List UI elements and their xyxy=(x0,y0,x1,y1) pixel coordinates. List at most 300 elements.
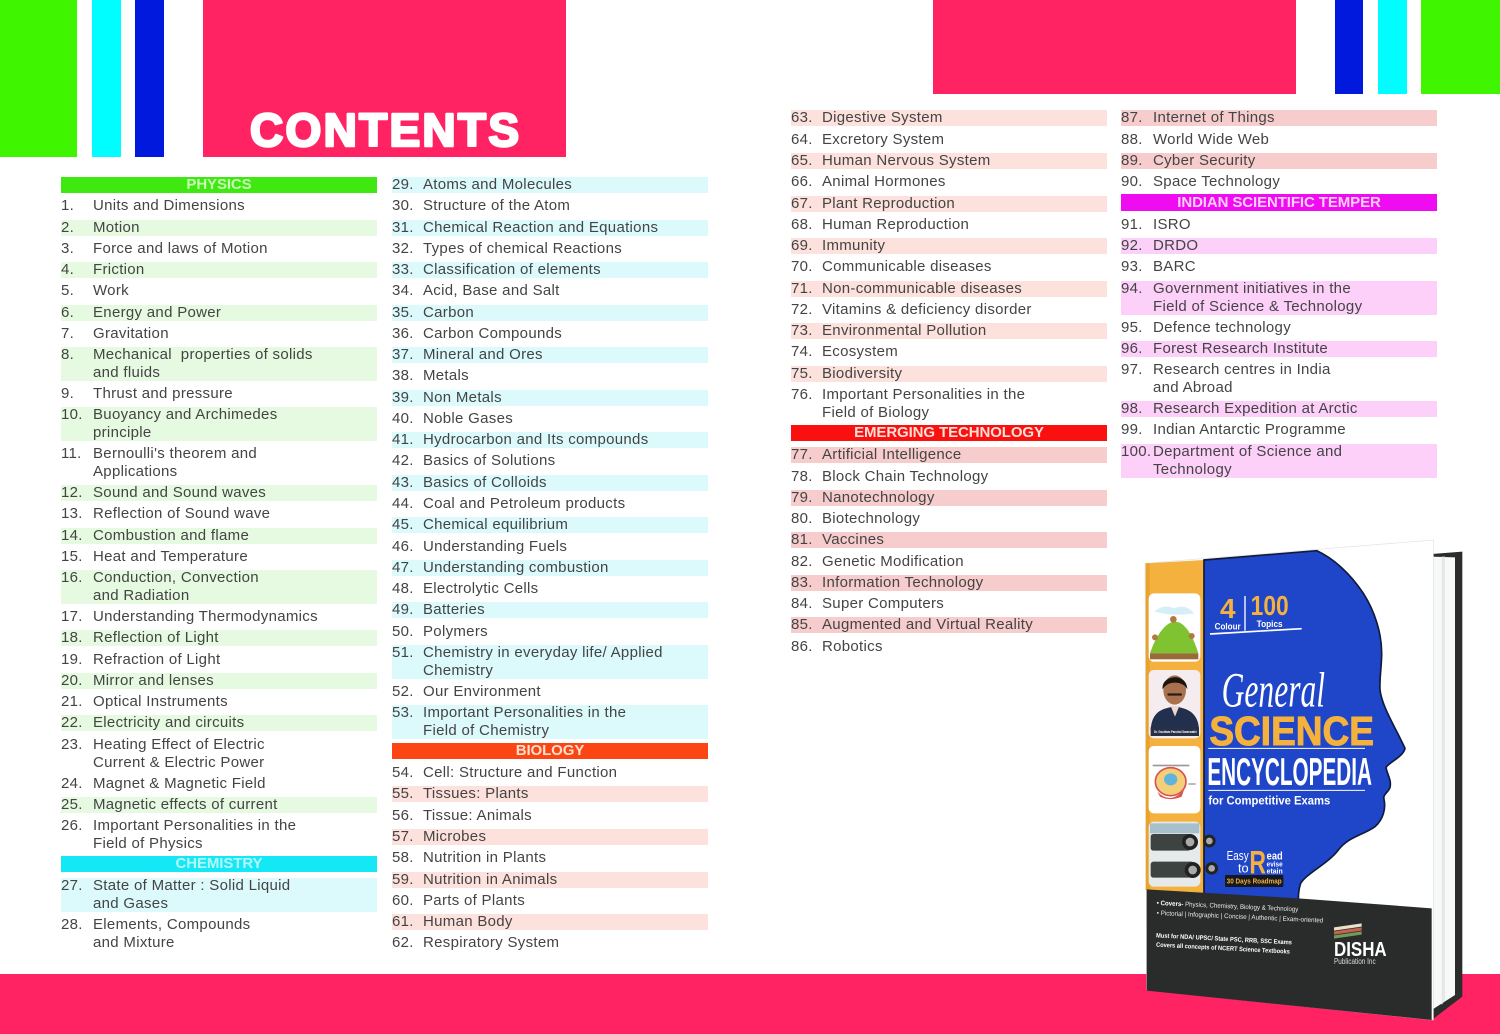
topic 98 xyxy=(1121,401,1437,417)
book title: for Competitive Exams xyxy=(1208,794,1331,808)
topic 19: 19. xyxy=(61,651,83,668)
topic 4: Friction xyxy=(93,261,145,278)
publisher logo: Publication Inc xyxy=(1334,956,1376,966)
topic 80 xyxy=(791,511,1107,527)
topic 97: and Abroad xyxy=(1153,379,1233,396)
topic 29 xyxy=(392,177,708,193)
topic 99 xyxy=(1121,422,1437,438)
topic 51: Chemistry xyxy=(423,662,493,679)
easy to read badge: Easy xyxy=(1227,849,1249,863)
topic 14: 14. xyxy=(61,527,83,544)
topic 11: Applications xyxy=(93,463,177,480)
panel: column two, chemistry and biology xyxy=(392,176,708,951)
easy to read badge: R xyxy=(1249,844,1266,880)
topic 82 xyxy=(791,554,1107,570)
topic 55 xyxy=(392,786,708,802)
topic 13: Reflection of Sound wave xyxy=(93,505,270,522)
topic 94 xyxy=(1121,281,1437,315)
topic 24: 24. xyxy=(61,775,83,792)
topic 90: 90. xyxy=(1121,173,1143,190)
topic 37 xyxy=(392,347,708,363)
picture card: portrait xyxy=(1149,670,1200,738)
topic 58: Nutrition in Plants xyxy=(423,849,546,866)
topic 88: 88. xyxy=(1121,131,1143,148)
topic 59: Nutrition in Animals xyxy=(423,871,557,888)
topic 26: Field of Physics xyxy=(93,835,203,852)
topic 22: Electricity and circuits xyxy=(93,714,244,731)
topic 35 xyxy=(392,305,708,321)
topic 94: Government initiatives in the xyxy=(1153,280,1351,297)
topic 28 xyxy=(61,916,250,951)
topic 26 xyxy=(61,817,296,852)
topic 33 xyxy=(392,262,708,278)
topic 16: Conduction, Convection xyxy=(93,569,259,586)
topic 21: Optical Instruments xyxy=(93,693,228,710)
picture card: machinery cylinders xyxy=(1149,822,1218,887)
topic 12: Sound and Sound waves xyxy=(93,484,266,501)
topic 64: 64. xyxy=(791,131,813,148)
topic 30: Structure of the Atom xyxy=(423,197,570,214)
topic 38: 38. xyxy=(392,367,414,384)
topic 73: 73. xyxy=(791,322,813,339)
dark lower cover band xyxy=(1147,889,1432,1020)
topic 96 xyxy=(1121,341,1437,357)
panel: column four, technology and Indian scientific temper xyxy=(1121,108,1437,478)
topic 91: 91. xyxy=(1121,216,1143,233)
topic 74 xyxy=(791,344,1107,360)
topic 12 xyxy=(61,485,377,501)
topic 83: Information Technology xyxy=(822,574,983,591)
topic 57: 57. xyxy=(392,828,414,845)
topic 79 xyxy=(791,490,1107,506)
topic 5: Work xyxy=(93,282,129,299)
topic 27: and Gases xyxy=(93,895,168,912)
topic 25: Magnetic effects of current xyxy=(93,796,278,813)
topic 91: ISRO xyxy=(1153,216,1191,233)
topic 62: Respiratory System xyxy=(423,934,559,951)
topic 51: 51. xyxy=(392,644,414,661)
topic 97 xyxy=(1121,362,1437,396)
topic 98: Research Expedition at Arctic xyxy=(1153,400,1358,417)
topic 80: Biotechnology xyxy=(822,510,920,527)
topic 75 xyxy=(791,366,1107,382)
topic 98: 98. xyxy=(1121,400,1143,417)
topic 10: principle xyxy=(93,424,152,441)
topic 49 xyxy=(392,602,708,618)
topic 100: Technology xyxy=(1153,461,1232,478)
topic 90 xyxy=(1121,174,1437,190)
topic 71: Non-communicable diseases xyxy=(822,280,1022,297)
topic 100 xyxy=(1121,444,1437,478)
topic 44: 44. xyxy=(392,495,414,512)
panel: column three, biology and emerging technology xyxy=(791,109,1107,655)
topic 8 xyxy=(61,347,377,381)
topic 2: Motion xyxy=(93,219,140,236)
topic 78 xyxy=(791,469,1107,485)
topic 17: Understanding Thermodynamics xyxy=(93,608,318,625)
topic 84 xyxy=(791,596,1107,612)
dark lower cover band: • Covers- Physics, Chemistry, Biology & Technology xyxy=(1157,900,1299,913)
topic 71: 71. xyxy=(791,280,813,297)
topic 92: 92. xyxy=(1121,237,1143,254)
topic 50: 50. xyxy=(392,623,414,640)
topic 39: 39. xyxy=(392,389,414,406)
topic 37: Mineral and Ores xyxy=(423,346,543,363)
topic 57: Microbes xyxy=(423,828,486,845)
topic 40: Noble Gases xyxy=(423,410,513,427)
topic 9: 9. xyxy=(61,385,74,402)
topic 67 xyxy=(791,196,1107,212)
easy to read badge: etain xyxy=(1267,868,1283,875)
topic 6: Energy and Power xyxy=(93,304,221,321)
title panel xyxy=(203,0,566,157)
topic 34: 34. xyxy=(392,282,414,299)
topic 93 xyxy=(1121,259,1437,275)
topic 41: 41. xyxy=(392,431,414,448)
heading: biology xyxy=(392,743,708,759)
topic 82: 82. xyxy=(791,553,813,570)
topic 8: and fluids xyxy=(93,364,160,381)
topic 100: 100. xyxy=(1121,443,1151,460)
top-left cyan band xyxy=(92,0,121,157)
topic 8: Mechanical properties of solids xyxy=(93,346,313,363)
topic 58: 58. xyxy=(392,849,414,866)
topic 82: Genetic Modification xyxy=(822,553,964,570)
topic 89: 89. xyxy=(1121,152,1143,169)
topic 35: 35. xyxy=(392,304,414,321)
topic 16: and Radiation xyxy=(93,587,189,604)
top-right green band xyxy=(1421,0,1500,94)
topic 94: Field of Science & Technology xyxy=(1153,298,1362,315)
topic 61: 61. xyxy=(392,913,414,930)
title: CONTENTS xyxy=(250,104,519,156)
topic 59: 59. xyxy=(392,871,414,888)
topic 27: 27. xyxy=(61,877,83,894)
topic 52: 52. xyxy=(392,683,414,700)
topic 87 xyxy=(1121,110,1437,126)
top-left blue band xyxy=(135,0,164,157)
topic 91 xyxy=(1121,217,1437,233)
topic 79: 79. xyxy=(791,489,813,506)
topic 36: 36. xyxy=(392,325,414,342)
topic 49: 49. xyxy=(392,601,414,618)
topic 47 xyxy=(392,560,708,576)
heading: chemistry: CHEMISTRY xyxy=(176,855,262,872)
topic 7: Gravitation xyxy=(93,325,169,342)
topic 32: 32. xyxy=(392,240,414,257)
blue head silhouette xyxy=(1204,551,1405,899)
topic 69 xyxy=(791,238,1107,254)
topic 99: 99. xyxy=(1121,421,1143,438)
topic 33: 33. xyxy=(392,261,414,278)
topic 92 xyxy=(1121,238,1437,254)
topic 13: 13. xyxy=(61,505,83,522)
topic 28: 28. xyxy=(61,916,83,933)
topic 20 xyxy=(61,673,377,689)
topic 99: Indian Antarctic Programme xyxy=(1153,421,1346,438)
topic 5: 5. xyxy=(61,282,74,299)
topic 72: 72. xyxy=(791,301,813,318)
topic 53: 53. xyxy=(392,704,414,721)
topic 8: 8. xyxy=(61,346,74,363)
topic 35: Carbon xyxy=(423,304,474,321)
picture card: cell diagram xyxy=(1149,746,1200,813)
topic 72 xyxy=(791,302,1107,318)
topic 89: Cyber Security xyxy=(1153,152,1256,169)
topic 14 xyxy=(61,528,377,544)
topic 94: 94. xyxy=(1121,280,1143,297)
topic 53: Important Personalities in the xyxy=(423,704,626,721)
topic 39: Non Metals xyxy=(423,389,502,406)
topic 83: 83. xyxy=(791,574,813,591)
topic 87: 87. xyxy=(1121,109,1143,126)
topic 70: 70. xyxy=(791,258,813,275)
topic 77 xyxy=(791,447,1107,463)
topic 77: Artificial Intelligence xyxy=(822,446,961,463)
publisher logo xyxy=(1334,923,1387,966)
topic 21: 21. xyxy=(61,693,83,710)
topic 57 xyxy=(392,829,708,845)
topic 67: 67. xyxy=(791,195,813,212)
topic 47: 47. xyxy=(392,559,414,576)
topic 81: Vaccines xyxy=(822,531,884,548)
topic 63 xyxy=(791,110,1107,126)
dark lower cover band: Covers all concepts of NCERT Science Textbooks xyxy=(1156,942,1290,956)
topic 25 xyxy=(61,797,377,813)
topic 18: 18. xyxy=(61,629,83,646)
topic 46: 46. xyxy=(392,538,414,555)
topic 60: Parts of Plants xyxy=(423,892,525,909)
topic 9: Thrust and pressure xyxy=(93,385,233,402)
topic 66: Animal Hormones xyxy=(822,173,946,190)
topic 76: Important Personalities in the xyxy=(822,386,1025,403)
topic 34: Acid, Base and Salt xyxy=(423,282,560,299)
bottom pink band xyxy=(0,974,1500,1034)
topic 88 xyxy=(1121,132,1437,148)
badge: 4 colour, 100 topics xyxy=(1210,590,1302,634)
panel: column one, physics and chemistry xyxy=(61,176,377,951)
top-right cyan band xyxy=(1378,0,1407,94)
topic 97: 97. xyxy=(1121,361,1143,378)
topic 81 xyxy=(791,532,1107,548)
book title: SCIENCE xyxy=(1209,708,1374,754)
topic 54: 54. xyxy=(392,764,414,781)
topic 6: 6. xyxy=(61,304,74,321)
topic 65: Human Nervous System xyxy=(822,152,991,169)
topic 10 xyxy=(61,407,377,441)
book title xyxy=(1207,662,1374,808)
topic 72: Vitamins & deficiency disorder xyxy=(822,301,1032,318)
badge: 4 colour, 100 topics: 4 xyxy=(1220,593,1236,624)
topic 26: Important Personalities in the xyxy=(93,817,296,834)
topic 78: Block Chain Technology xyxy=(822,468,988,485)
topic 76: 76. xyxy=(791,386,813,403)
topic 43 xyxy=(392,475,708,491)
topic 46: Understanding Fuels xyxy=(423,538,567,555)
topic 62: 62. xyxy=(392,934,414,951)
topic 56: Tissue: Animals xyxy=(423,807,532,824)
topic 85 xyxy=(791,617,1107,633)
topic 11 xyxy=(61,445,257,480)
topic 37: 37. xyxy=(392,346,414,363)
badge: 4 colour, 100 topics: 100 xyxy=(1251,590,1289,621)
topic 3: Force and laws of Motion xyxy=(93,240,268,257)
topic 14: Combustion and flame xyxy=(93,527,249,544)
easy to read badge: ead xyxy=(1267,850,1283,862)
topic 39 xyxy=(392,390,708,406)
topic 41: Hydrocarbon and Its compounds xyxy=(423,431,648,448)
topic 12: 12. xyxy=(61,484,83,501)
topic 28: Elements, Compounds xyxy=(93,916,250,933)
badge: 4 colour, 100 topics: Topics xyxy=(1257,619,1283,629)
topic 41 xyxy=(392,432,708,448)
topic 29: Atoms and Molecules xyxy=(423,176,572,193)
topic 52: Our Environment xyxy=(423,683,541,700)
topic 43: Basics of Colloids xyxy=(423,474,547,491)
topic 86: 86. xyxy=(791,638,813,655)
topic 2: 2. xyxy=(61,219,74,236)
picture card: hill xyxy=(1149,593,1200,662)
topic 5 xyxy=(61,282,129,299)
topic 54: Cell: Structure and Function xyxy=(423,764,617,781)
topic 81: 81. xyxy=(791,531,813,548)
topic 11: 11. xyxy=(61,445,82,462)
topic 79: Nanotechnology xyxy=(822,489,935,506)
topic 93: BARC xyxy=(1153,258,1196,275)
topic 10: Buoyancy and Archimedes xyxy=(93,406,278,423)
topic 23 xyxy=(61,736,265,771)
easy to read badge: evise xyxy=(1267,862,1283,869)
heading: emerging technology xyxy=(791,425,1107,441)
heading: emerging technology: EMERGING TECHNOLOGY xyxy=(854,424,1044,441)
topic 86 xyxy=(791,639,1107,655)
topic 27: State of Matter : Solid Liquid xyxy=(93,877,290,894)
orange spine strip xyxy=(1146,560,1204,898)
topic 68: 68. xyxy=(791,216,813,233)
book title: General xyxy=(1222,662,1325,718)
topic 30: 30. xyxy=(392,197,414,214)
topic 1: 1. xyxy=(61,197,74,214)
topic 36: Carbon Compounds xyxy=(423,325,562,342)
topic 75: 75. xyxy=(791,365,813,382)
topic 56: 56. xyxy=(392,807,414,824)
topic 32: Types of chemical Reactions xyxy=(423,240,622,257)
topic 74: 74. xyxy=(791,343,813,360)
topic 80: 80. xyxy=(791,510,813,527)
topic 95: 95. xyxy=(1121,319,1143,336)
topic 87: Internet of Things xyxy=(1153,109,1275,126)
topic 95: Defence technology xyxy=(1153,319,1291,336)
topic 69: 69. xyxy=(791,237,813,254)
publisher logo: DISHA xyxy=(1334,938,1387,961)
topic 61: Human Body xyxy=(423,913,513,930)
topic 33: Classification of elements xyxy=(423,261,601,278)
topic 20: 20. xyxy=(61,672,83,689)
back cover and page block xyxy=(1432,552,1462,1020)
topic 16 xyxy=(61,570,377,604)
topic 31: Chemical Reaction and Equations xyxy=(423,219,658,236)
topic 88: World Wide Web xyxy=(1153,131,1269,148)
topic 48: Electrolytic Cells xyxy=(423,580,538,597)
topic 18: Reflection of Light xyxy=(93,629,219,646)
topic 15: 15. xyxy=(61,548,83,565)
topic 38 xyxy=(392,367,469,384)
topic 68: Human Reproduction xyxy=(822,216,969,233)
topic 31: 31. xyxy=(392,219,414,236)
topic 61 xyxy=(392,914,708,930)
topic 55: Tissues: Plants xyxy=(423,785,529,802)
topic 17: 17. xyxy=(61,608,83,625)
topic 45 xyxy=(392,517,708,533)
topic 73 xyxy=(791,323,1107,339)
topic 70: Communicable diseases xyxy=(822,258,992,275)
topic 42: Basics of Solutions xyxy=(423,452,555,469)
topic 18 xyxy=(61,630,377,646)
topic 86: Robotics xyxy=(822,638,883,655)
topic 92: DRDO xyxy=(1153,237,1198,254)
topic 50: Polymers xyxy=(423,623,488,640)
topic 74: Ecosystem xyxy=(822,343,898,360)
topic 29: 29. xyxy=(392,176,414,193)
topic 45: 45. xyxy=(392,516,414,533)
topic 48: 48. xyxy=(392,580,414,597)
topic 67: Plant Reproduction xyxy=(822,195,955,212)
topic 53: Field of Chemistry xyxy=(423,722,549,739)
topic 73: Environmental Pollution xyxy=(822,322,986,339)
easy to read badge: to xyxy=(1238,862,1249,876)
topic 85: Augmented and Virtual Reality xyxy=(822,616,1033,633)
topic 89 xyxy=(1121,153,1437,169)
topic 55: 55. xyxy=(392,785,414,802)
topic 95 xyxy=(1121,320,1437,336)
topic 49: Batteries xyxy=(423,601,485,618)
topic 40: 40. xyxy=(392,410,414,427)
heading: Indian scientific temper: INDIAN SCIENTIFIC TEMPER xyxy=(1177,194,1381,211)
topic 50 xyxy=(392,623,488,640)
topic 44: Coal and Petroleum products xyxy=(423,495,625,512)
topic 42: 42. xyxy=(392,452,414,469)
topic 53 xyxy=(392,705,708,739)
topic 1: Units and Dimensions xyxy=(93,197,245,214)
heading: chemistry xyxy=(61,856,377,872)
heading: physics: PHYSICS xyxy=(186,176,252,193)
topic 78: 78. xyxy=(791,468,813,485)
topic 76 xyxy=(791,387,1107,421)
heading: biology: BIOLOGY xyxy=(516,742,584,759)
topic 23: 23. xyxy=(61,736,83,753)
topic 45: Chemical equilibrium xyxy=(423,516,568,533)
topic 69: Immunity xyxy=(822,237,885,254)
topic 75: Biodiversity xyxy=(822,365,902,382)
topic 84: Super Computers xyxy=(822,595,944,612)
topic 65 xyxy=(791,153,1107,169)
front cover base xyxy=(1145,540,1433,1020)
topic 43: 43. xyxy=(392,474,414,491)
topic 96: 96. xyxy=(1121,340,1143,357)
topic 76: Field of Biology xyxy=(822,404,929,421)
dark lower cover band: • Pictorial | Infographic | Concise | Authentic | Exam-oriented xyxy=(1157,910,1324,925)
topic 83 xyxy=(791,575,1107,591)
topic 59 xyxy=(392,872,708,888)
topic 15: Heat and Temperature xyxy=(93,548,248,565)
topic 51 xyxy=(392,645,708,679)
top-left green band xyxy=(0,0,77,157)
topic 38: Metals xyxy=(423,367,469,384)
topic 66: 66. xyxy=(791,173,813,190)
topic 20: Mirror and lenses xyxy=(93,672,214,689)
topic 71 xyxy=(791,281,1107,297)
topic 64: Excretory System xyxy=(822,131,944,148)
